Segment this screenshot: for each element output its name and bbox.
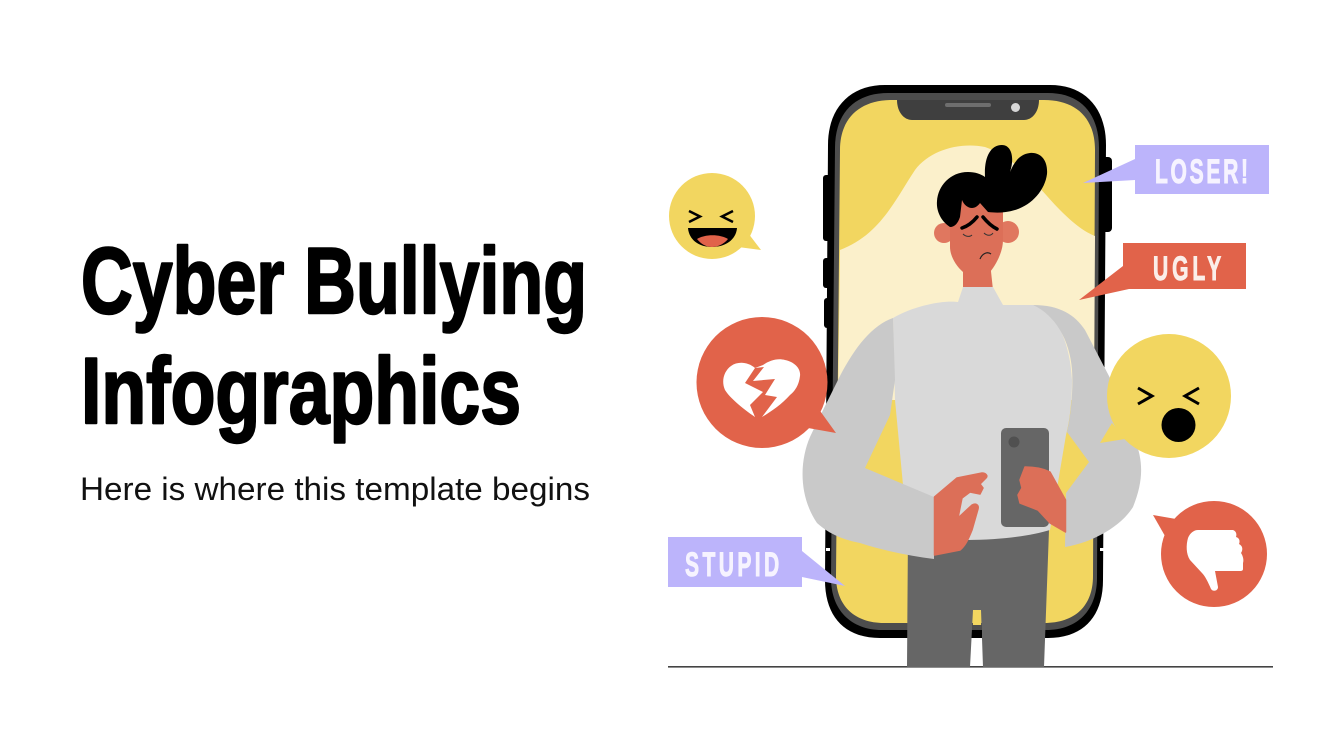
bubble body — [1100, 334, 1231, 458]
screen edge specks — [826, 548, 1104, 551]
phone bezel — [831, 93, 1099, 630]
notch speaker and camera — [945, 103, 1020, 112]
label: STUPID — [668, 537, 845, 587]
person — [803, 145, 1141, 667]
eyes — [963, 233, 993, 236]
eyebrows — [962, 217, 997, 229]
ears — [934, 223, 954, 243]
speech bubble: thumbs down — [1153, 501, 1267, 607]
label text: LOSER! — [1155, 152, 1248, 190]
heart — [723, 359, 800, 417]
closed eyes — [1138, 388, 1199, 404]
title: Infographics — [81, 338, 521, 443]
sweater torso — [893, 287, 1072, 540]
closed eyes — [689, 211, 733, 222]
trousers — [907, 530, 1049, 667]
phone screen — [836, 100, 1095, 623]
phone illustration — [823, 85, 1112, 638]
speech bubble: broken heart — [696, 317, 836, 448]
label shape — [668, 537, 845, 587]
left hand — [934, 473, 987, 555]
label shape — [1079, 243, 1246, 300]
left sleeve — [803, 318, 934, 559]
title — [81, 228, 587, 443]
screen cream wave — [838, 146, 1095, 400]
title: Cyber Bullying — [81, 228, 587, 333]
mouth — [980, 253, 991, 259]
speech bubble: shouting emoji — [1100, 334, 1231, 458]
bubble body — [696, 317, 836, 448]
gap between legs — [972, 610, 982, 638]
label: UGLY — [1079, 243, 1246, 300]
phone notch — [897, 100, 1039, 120]
speech bubble: laughing emoji — [669, 173, 761, 259]
head — [934, 145, 1047, 272]
phone side buttons — [823, 157, 1112, 328]
thumb icon — [1187, 530, 1243, 591]
right hand — [1018, 467, 1066, 532]
hair — [937, 145, 1047, 227]
ground line — [668, 666, 1273, 668]
label text: UGLY — [1153, 249, 1221, 287]
mouth — [1162, 408, 1196, 442]
phone body — [825, 85, 1106, 638]
heart crack — [745, 367, 777, 417]
label shape — [1083, 145, 1269, 194]
label: LOSER! — [1083, 145, 1269, 194]
bubble body — [1153, 501, 1267, 607]
neck — [963, 262, 993, 290]
face — [950, 200, 1003, 272]
subtitle: Here is where this template begins — [80, 471, 590, 507]
label text: STUPID — [685, 545, 779, 583]
bubble body — [669, 173, 761, 259]
right sleeve — [1033, 305, 1141, 547]
open mouth — [688, 228, 737, 247]
held phone — [1001, 428, 1049, 527]
tongue — [697, 235, 728, 247]
